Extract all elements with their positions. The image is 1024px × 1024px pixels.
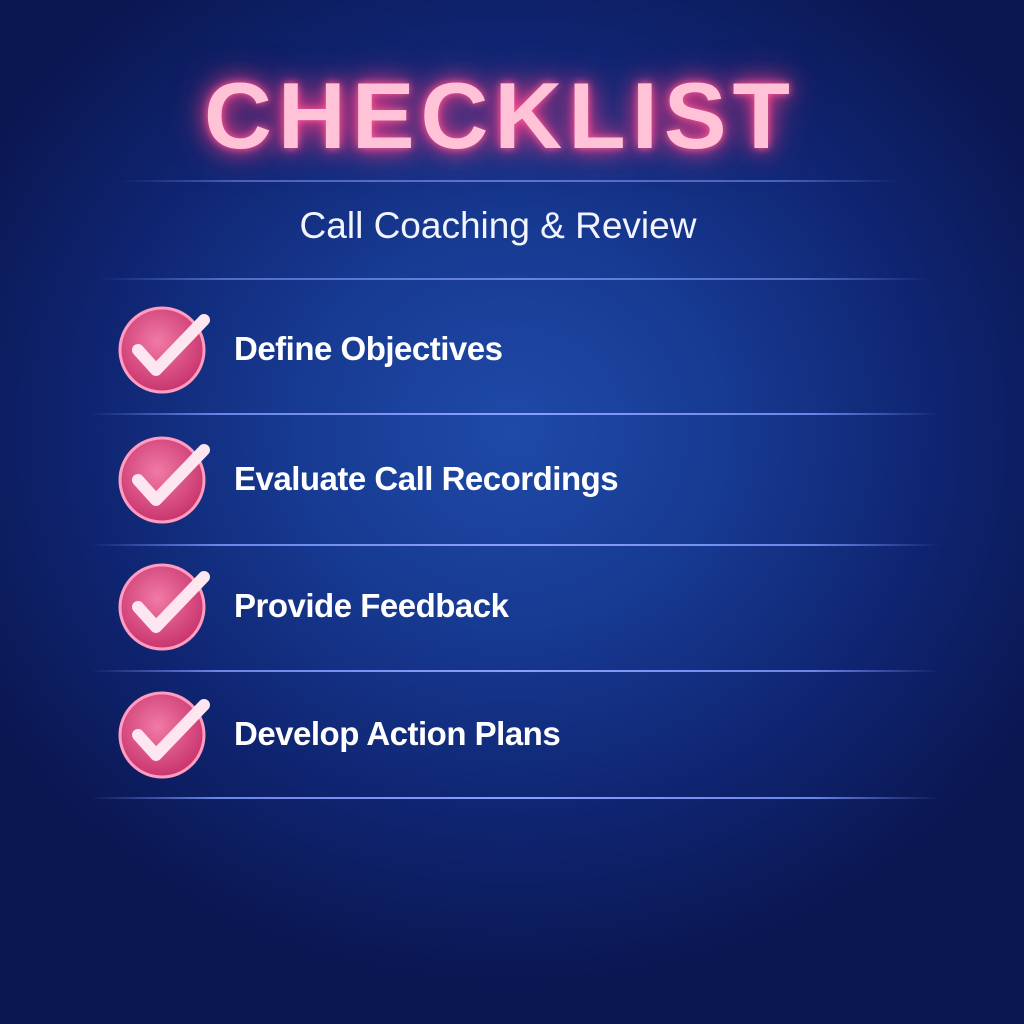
item: Define Objectives (118, 306, 502, 394)
title: CHECKLIST (204, 63, 796, 168)
subtitle: Call Coaching & Review (300, 205, 696, 246)
item: Provide Feedback (118, 564, 509, 650)
item: Develop Action Plans (118, 692, 560, 778)
item: Provide Feedback: Provide Feedback (234, 587, 508, 624)
item: Evaluate Call Recordings (118, 436, 618, 524)
item: Evaluate Call Recordings: Evaluate Call Recordings (234, 460, 618, 497)
item: Develop Action Plans: Develop Action Plans (234, 715, 560, 752)
item: Define Objectives: Define Objectives (234, 330, 502, 367)
